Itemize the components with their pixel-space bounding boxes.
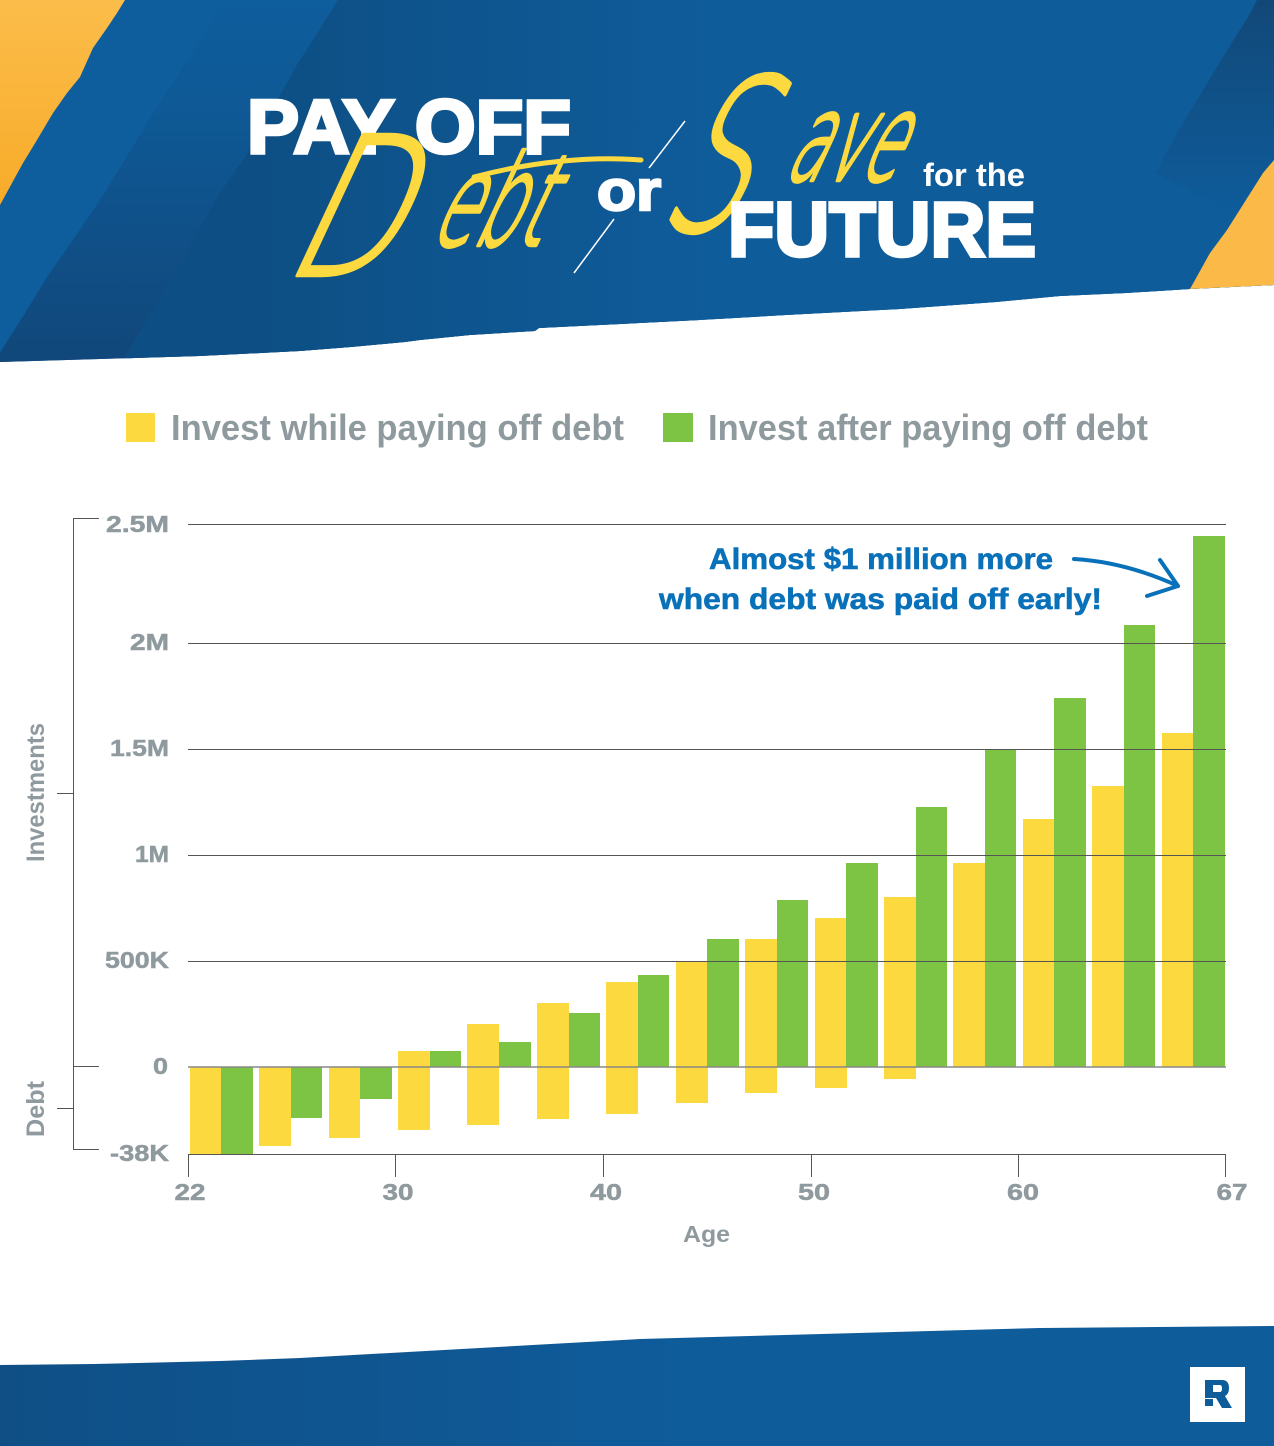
callout text line 1: Almost $1 million more [709, 543, 1053, 576]
y axis labels: 2.5M [106, 511, 169, 537]
x axis labels: 40 [590, 1179, 622, 1205]
y axis labels: -38K [110, 1140, 169, 1166]
title: pay off: PAY OFF [247, 85, 571, 170]
x axis labels: 60 [1007, 1179, 1039, 1205]
arrow [1074, 559, 1178, 596]
y axis labels: 1.5M [110, 735, 169, 761]
icon: logo [1190, 1367, 1245, 1422]
bar chart [22, 511, 1248, 1247]
title: save script: ave [770, 70, 946, 208]
divider slash top [649, 121, 685, 168]
bars: invest while paying off debt [190, 733, 1194, 1154]
title: debt script: D [259, 96, 473, 321]
x axis labels: 67 [1216, 1179, 1248, 1205]
y axis labels: 2M [130, 629, 169, 655]
axis title: debt: Debt [22, 1080, 50, 1137]
legend label: while: Invest while paying off debt [171, 407, 624, 448]
x axis labels: 22 [174, 1179, 206, 1205]
y axis labels: 0 [153, 1053, 168, 1079]
callout text line 2: when debt was paid off early! [658, 583, 1102, 616]
legend [126, 407, 1148, 448]
title [247, 36, 1036, 321]
divider slash bottom [574, 219, 614, 273]
orange corner top left [0, 0, 125, 205]
header banner [0, 0, 1274, 365]
legend swatch: while [126, 413, 155, 442]
footer banner [0, 1326, 1274, 1446]
title: debt script: ebt [414, 130, 594, 275]
title: for the: for the [923, 157, 1025, 193]
title: or: or [597, 159, 661, 223]
callout [658, 543, 1178, 616]
axis title: investments: Investments [22, 723, 50, 862]
legend label: after: Invest after paying off debt [708, 407, 1148, 448]
axis title: age: Age [683, 1221, 730, 1247]
title: save script: S [631, 36, 826, 280]
y axis labels: 500K [105, 947, 169, 973]
bars: invest after paying off debt [221, 536, 1225, 1154]
x axis labels: 30 [382, 1179, 414, 1205]
orange corner right [1190, 160, 1274, 290]
x axis labels: 50 [798, 1179, 830, 1205]
y axis labels: 1M [135, 841, 169, 867]
title: future: FUTURE [728, 187, 1036, 273]
title: debt script [259, 96, 641, 321]
y axis labels [105, 511, 169, 1166]
legend swatch: after [663, 413, 693, 442]
x axis labels [174, 1179, 1248, 1205]
